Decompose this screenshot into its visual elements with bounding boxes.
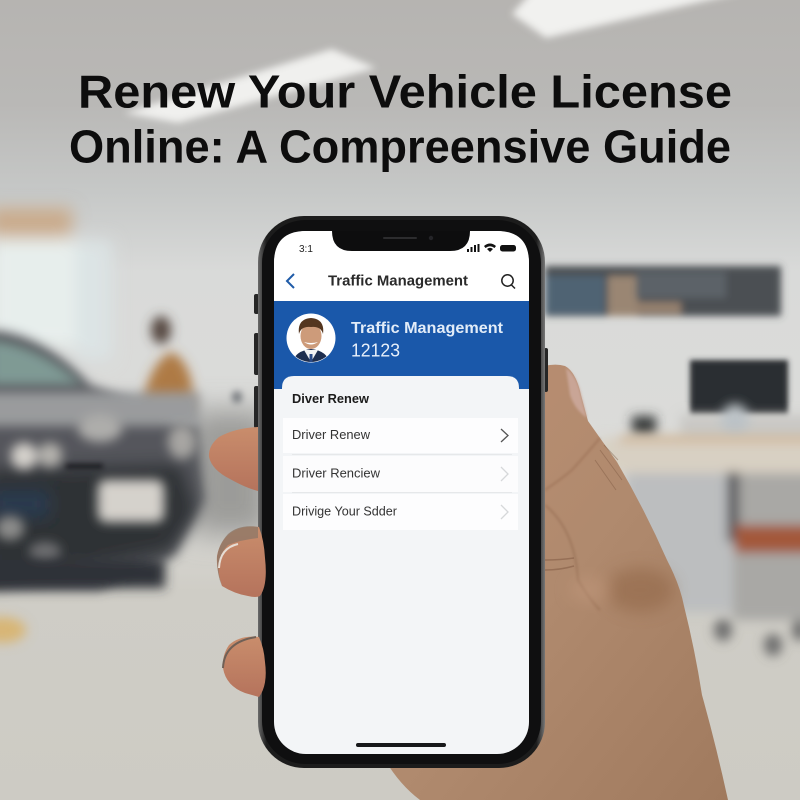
search icon [502, 275, 515, 288]
avatar [286, 314, 336, 362]
title: Renew Your Vehicle License [78, 66, 732, 118]
title [69, 66, 732, 172]
desk items [632, 404, 800, 439]
list row 3: Drivige Your Sdder [292, 504, 397, 518]
knuckle shadow [606, 568, 674, 612]
list row 2: Driver Renciew [292, 466, 381, 480]
phone body [258, 216, 545, 768]
menu card [282, 376, 519, 530]
blue header band [274, 301, 529, 389]
skin texture [595, 445, 622, 490]
middle finger [217, 526, 266, 597]
wall display shelf [545, 266, 781, 316]
card heading: Diver Renew [292, 391, 370, 406]
thumb crease [545, 438, 600, 490]
desk and chair [600, 436, 800, 656]
palm wrinkles [545, 558, 574, 570]
ring finger [223, 637, 266, 697]
grey area near phone [190, 410, 270, 535]
status bar icons [467, 244, 516, 252]
list row 3 [283, 494, 518, 530]
blurred car [0, 330, 205, 590]
monitor [690, 360, 788, 414]
phone [254, 216, 548, 768]
palm fold [545, 505, 600, 610]
notch [332, 231, 470, 251]
top bar title: Traffic Management [328, 274, 468, 290]
phone screen [274, 231, 529, 754]
back chevron [287, 274, 294, 288]
yellow floor marking [0, 617, 26, 643]
home indicator [356, 743, 446, 747]
window on left wall [0, 208, 112, 360]
index finger [209, 427, 258, 491]
app top bar [274, 231, 529, 301]
phone side buttons [254, 294, 548, 428]
header title: Traffic Management [351, 320, 503, 337]
status bar time: 3:1 [299, 244, 313, 255]
ceiling light panels [124, 0, 760, 123]
thumb nail highlight [566, 368, 587, 418]
list row 1: Driver Renew [292, 428, 371, 442]
blurred wall dot [232, 391, 242, 403]
list row 2 [283, 456, 518, 492]
header number: 12123 [351, 340, 400, 360]
knuckle highlight [570, 577, 610, 603]
list row 1 [283, 418, 518, 453]
blurred person [140, 316, 193, 414]
hand: palm and thumb behind phone [385, 365, 728, 800]
title: Online: A Compreensive Guide [69, 120, 731, 172]
